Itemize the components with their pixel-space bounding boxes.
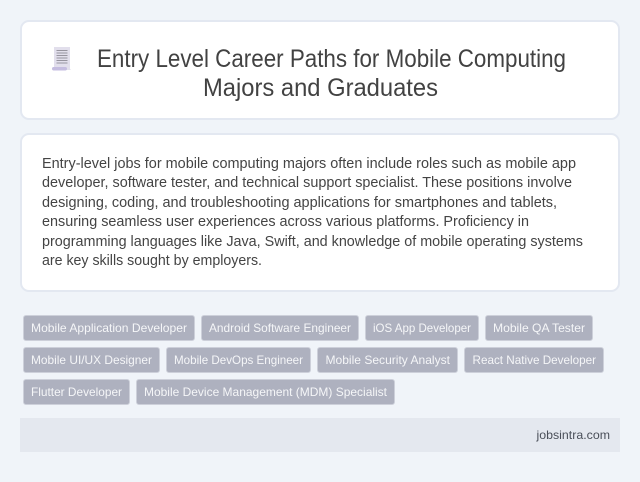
description text (42, 156, 583, 269)
tag: Flutter Developer: Flutter Developer (31, 385, 122, 399)
footer (20, 418, 620, 452)
tag: Android Software Engineer: Android Software Engineer (209, 321, 351, 335)
tag: Mobile Application Developer: Mobile Application Developer (31, 321, 187, 335)
tag: Mobile DevOps Engineer (166, 348, 310, 372)
tag: Mobile QA Tester (486, 316, 592, 340)
tag: React Native Developer (464, 348, 604, 372)
footer source text: jobsintra.com (535, 428, 610, 442)
tag: Android Software Engineer (202, 316, 358, 340)
tag: Mobile Application Developer (24, 316, 194, 340)
description text: are key skills sought by employers. (42, 253, 262, 269)
description text: programming languages like Java, Swift, and knowledge of mobile operating systems (42, 234, 583, 250)
title (97, 45, 566, 102)
tag: Mobile Device Management (MDM) Specialist: Mobile Device Management (MDM) Specialist (144, 385, 388, 399)
tag: React Native Developer: React Native Developer (472, 353, 596, 367)
title: Entry Level Career Paths for Mobile Computing (97, 45, 566, 73)
tag: Mobile QA Tester: Mobile QA Tester (493, 321, 585, 335)
description text: developer, software tester, and technical support specialist. These positions involve (42, 175, 572, 191)
tag: Mobile Security Analyst: Mobile Security Analyst (326, 353, 451, 367)
description text: designing, coding, and troubleshooting applications for smartphones and tablets, (42, 195, 557, 211)
tag: Flutter Developer (24, 380, 130, 404)
tag: Mobile UI/UX Designer (24, 348, 160, 372)
icon: paper scroll (52, 47, 71, 70)
tag: Mobile Security Analyst (318, 348, 458, 372)
description text: ensuring seamless user experiences across various platforms. Proficiency in (42, 214, 529, 230)
tag: Mobile DevOps Engineer: Mobile DevOps Engineer (174, 353, 303, 367)
tag: iOS App Developer (366, 316, 478, 340)
panel: description (21, 134, 619, 291)
title: Majors and Graduates (203, 74, 438, 102)
description text: Entry-level jobs for mobile computing majors often include roles such as mobile app (42, 156, 576, 172)
tag: Mobile Device Management (MDM) Specialist (136, 380, 394, 404)
tag: iOS App Developer: iOS App Developer (373, 321, 471, 335)
panel: title header (21, 21, 619, 119)
tag: Mobile UI/UX Designer: Mobile UI/UX Designer (31, 353, 152, 367)
tag list (24, 316, 604, 404)
